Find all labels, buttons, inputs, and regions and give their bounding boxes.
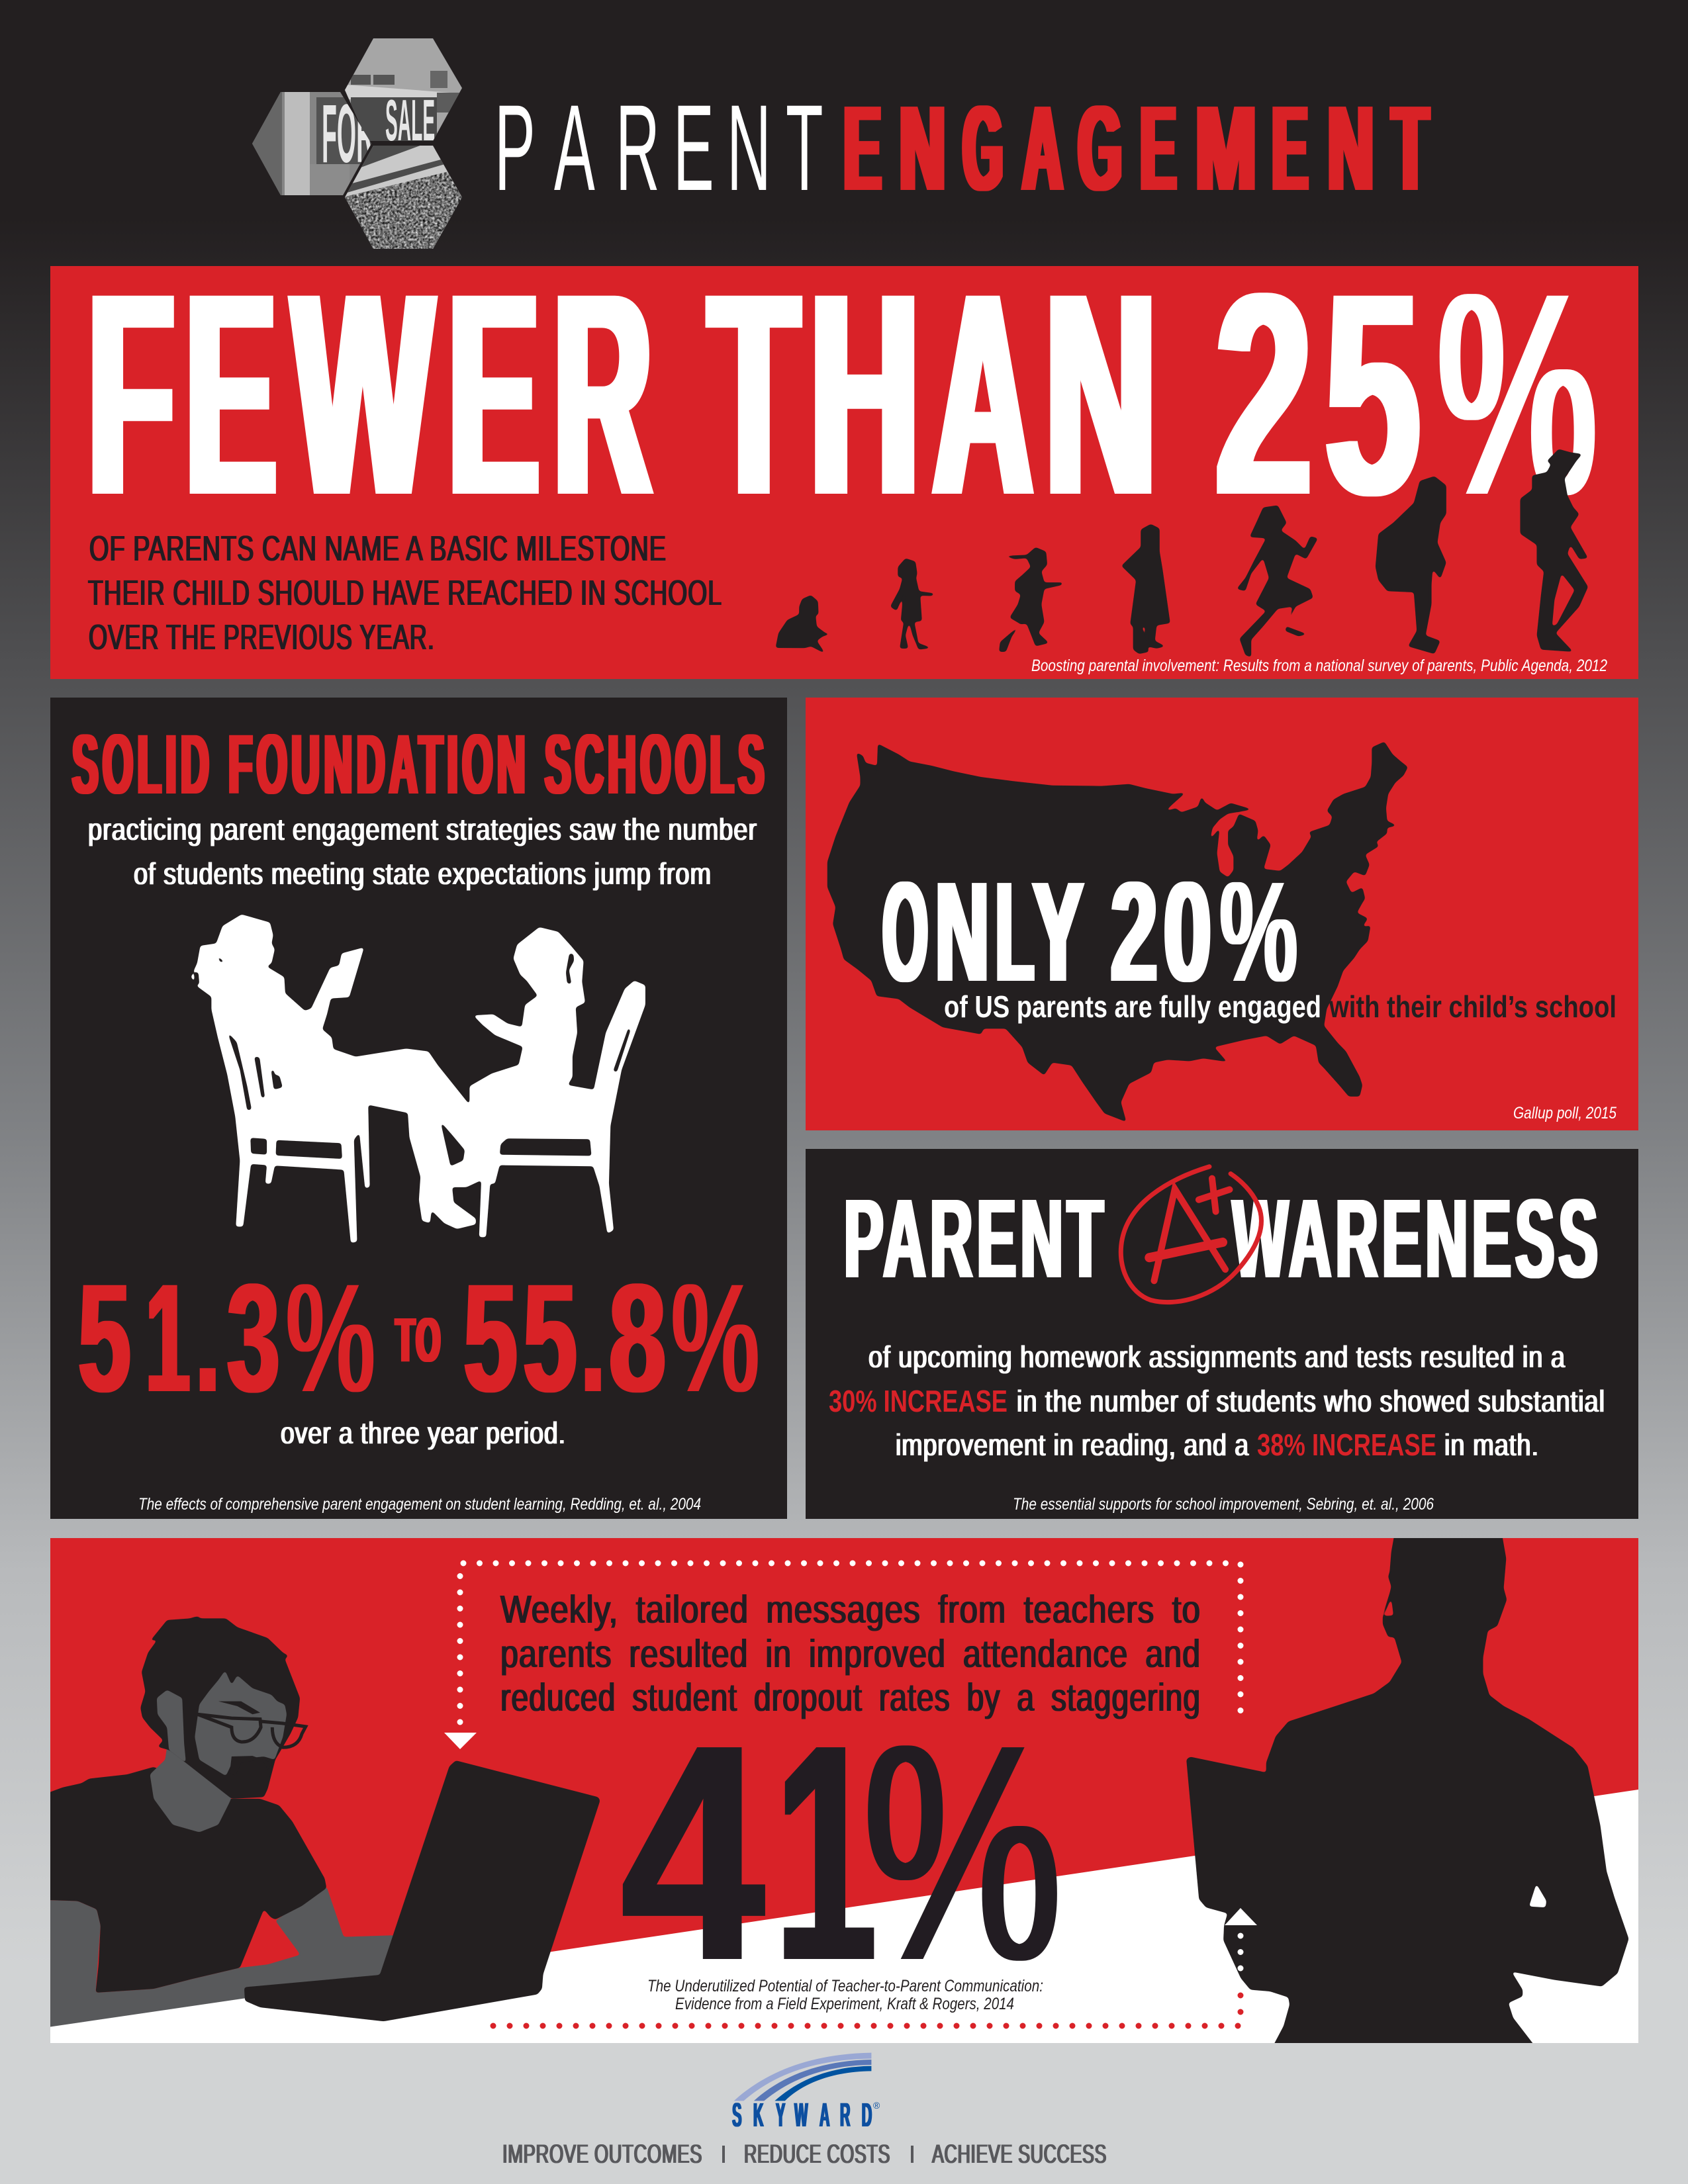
headline: fewer than 25%: % — [1437, 234, 1597, 555]
text block: homework assignments result: improvement in reading, and a — [896, 1428, 1249, 1462]
stat: 51.3% to 55.8%: 3 — [227, 1252, 279, 1424]
stat: only 20%: % — [1220, 852, 1297, 1011]
panel: fewer than 25% — [50, 234, 1638, 679]
stat: only 20%: O — [883, 852, 928, 1011]
headline: fewer than 25%: F — [89, 234, 173, 555]
title: Parent Engagement: G — [1078, 80, 1121, 216]
title: Parent Engagement: E — [844, 80, 881, 216]
stat: 51.3% to 55.8%: 1 — [146, 1252, 190, 1424]
logo: hexagon photo cluster of for-sale sign — [250, 36, 467, 250]
headline: fewer than 25%: 5 — [1325, 234, 1421, 555]
icon: mother and daughter reading in chairs — [191, 915, 645, 1243]
text block: weekly messages: Weekly, tailored messages from teachers to — [500, 1588, 1201, 1631]
source citation: Gallup poll, 2015 — [1513, 1104, 1617, 1122]
headline: fewer than 25%: W — [293, 234, 434, 555]
source citation: The effects of comprehensive parent engagement on student learning, Redding, et. al., 2004 — [138, 1495, 701, 1514]
heading: parent awareness — [844, 1176, 1602, 1302]
stat: 51.3% to 55.8% — [78, 1252, 759, 1424]
title: Parent Engagement: PARENT — [494, 79, 823, 216]
map: contiguous United States silhouette — [827, 742, 1408, 1122]
panel: teacher to parent messages — [32, 1522, 1638, 2059]
source citation: Evidence from a Field Experiment, Kraft & Rogers, 2014 — [675, 1995, 1014, 2013]
logo: Skyward: SKYWARD — [732, 2097, 872, 2134]
headline: fewer than 25%: T — [709, 234, 799, 555]
stat: 51.3% to 55.8%: . — [196, 1252, 220, 1424]
title: Parent Engagement: M — [1196, 80, 1256, 216]
logo: Skyward: ® — [873, 2100, 880, 2111]
source citation: The Underutilized Potential of Teacher-to-Parent Communication: — [647, 1977, 1043, 1995]
text block: homework assignments result: 38% INCREASE — [1257, 1428, 1436, 1462]
text block: weekly messages — [500, 1588, 1201, 1719]
text: SOLID FOUNDATION SCHOOLS — [72, 717, 769, 812]
text block: homework assignments result: in math. — [1444, 1428, 1539, 1462]
stat: only 20%: N — [935, 852, 989, 1011]
stat: 51.3% to 55.8%: TO — [396, 1305, 442, 1375]
stat: 51.3% to 55.8%: % — [671, 1252, 759, 1424]
headline: fewer than 25%: H — [810, 234, 919, 555]
stat: only 20%: 0 — [1164, 852, 1211, 1011]
text block: fully engaged statement: with their child’s school — [1329, 989, 1617, 1024]
icon: circled A+ grade — [1121, 1167, 1262, 1302]
text block: milestone statement: THEIR CHILD SHOULD HAVE REACHED IN SCHOOL — [88, 573, 722, 613]
panel: solid foundation schools — [50, 698, 787, 1519]
text block: period: over a three year period. — [281, 1416, 566, 1450]
heading: parent awareness: PARENT — [844, 1176, 1107, 1302]
text block: intro: practicing parent engagement strategies saw the number — [88, 812, 757, 846]
stat: 51.3% to 55.8%: 5 — [463, 1252, 518, 1424]
text block: weekly messages: parents resulted in improved attendance and — [500, 1632, 1201, 1676]
headline: fewer than 25%: 2 — [1215, 234, 1313, 555]
headline: fewer than 25%: E — [449, 234, 539, 555]
stat: 41%: % — [863, 1680, 1062, 2025]
footer tagline: IMPROVE OUTCOMES — [502, 2140, 702, 2169]
icon: teacher silhouette holding tablet — [1186, 1522, 1629, 2059]
source citation: The essential supports for school improvement, Sebring, et. al., 2006 — [1013, 1495, 1434, 1514]
stat: only 20%: Y — [1033, 852, 1082, 1011]
dotted connector frame with arrows — [444, 1563, 1257, 2026]
icon: children growing silhouettes — [775, 449, 1588, 657]
text block: weekly messages: reduced student dropout rates by a staggering — [500, 1676, 1201, 1719]
stat: 41%: 4 — [622, 1680, 765, 2025]
title: Parent Engagement: E — [1141, 80, 1176, 216]
headline: fewer than 25% — [89, 234, 1597, 555]
text block: homework assignments result — [829, 1340, 1605, 1462]
stat: only 20%: L — [996, 852, 1034, 1011]
stat: only 20% — [883, 852, 1297, 1011]
title: Parent Engagement: E — [1272, 80, 1307, 216]
title: Parent Engagement: G — [963, 80, 1003, 216]
title: Parent Engagement: N — [900, 80, 945, 216]
text block: homework assignments result: 30% INCREASE — [829, 1384, 1008, 1418]
panel: parent awareness — [806, 1149, 1638, 1519]
text block: milestone statement: OF PARENTS CAN NAME A BASIC MILESTONE — [89, 529, 667, 569]
title: Parent Engagement: A — [1023, 80, 1062, 216]
footer tagline: REDUCE COSTS — [744, 2140, 890, 2169]
footer tagline — [502, 2140, 1107, 2169]
stat: 41% — [622, 1680, 1062, 2025]
text block: milestone statement — [88, 529, 722, 657]
text block: fully engaged statement: of US parents are fully engaged — [944, 989, 1321, 1024]
stat: 51.3% to 55.8%: 5 — [523, 1252, 577, 1424]
stat: 51.3% to 55.8%: 5 — [78, 1252, 131, 1424]
title: Parent Engagement: N — [1328, 80, 1374, 216]
text block: intro: of students meeting state expectations jump from — [134, 856, 712, 891]
footer tagline: ACHIEVE SUCCESS — [932, 2140, 1107, 2169]
icon: parent at laptop illustration — [32, 1612, 600, 2029]
stat: 51.3% to 55.8%: . — [581, 1252, 605, 1424]
text: T — [1392, 80, 1429, 216]
text block: milestone statement: OVER THE PREVIOUS YEAR. — [89, 617, 435, 657]
stat: 41%: 1 — [775, 1680, 876, 2025]
stat: 51.3% to 55.8%: % — [286, 1252, 375, 1424]
headline: fewer than 25%: E — [186, 234, 276, 555]
logo: hexagon photo cluster of for-sale sign: SALE — [385, 88, 435, 153]
headline: fewer than 25%: N — [1045, 234, 1156, 555]
headline: fewer than 25%: A — [933, 234, 1033, 555]
headline: fewer than 25%: R — [554, 234, 651, 555]
text block: intro — [88, 812, 757, 891]
panel: only 20% of US parents — [806, 698, 1638, 1130]
logo: Skyward — [732, 2053, 880, 2134]
stat: 51.3% to 55.8%: 8 — [609, 1252, 666, 1424]
stat: only 20%: 2 — [1111, 852, 1157, 1011]
title: Parent Engagement — [494, 79, 1429, 216]
logo: hexagon photo cluster of for-sale sign: FOR — [322, 87, 374, 180]
text block: fully engaged statement — [944, 989, 1617, 1024]
source citation — [647, 1977, 1043, 2013]
